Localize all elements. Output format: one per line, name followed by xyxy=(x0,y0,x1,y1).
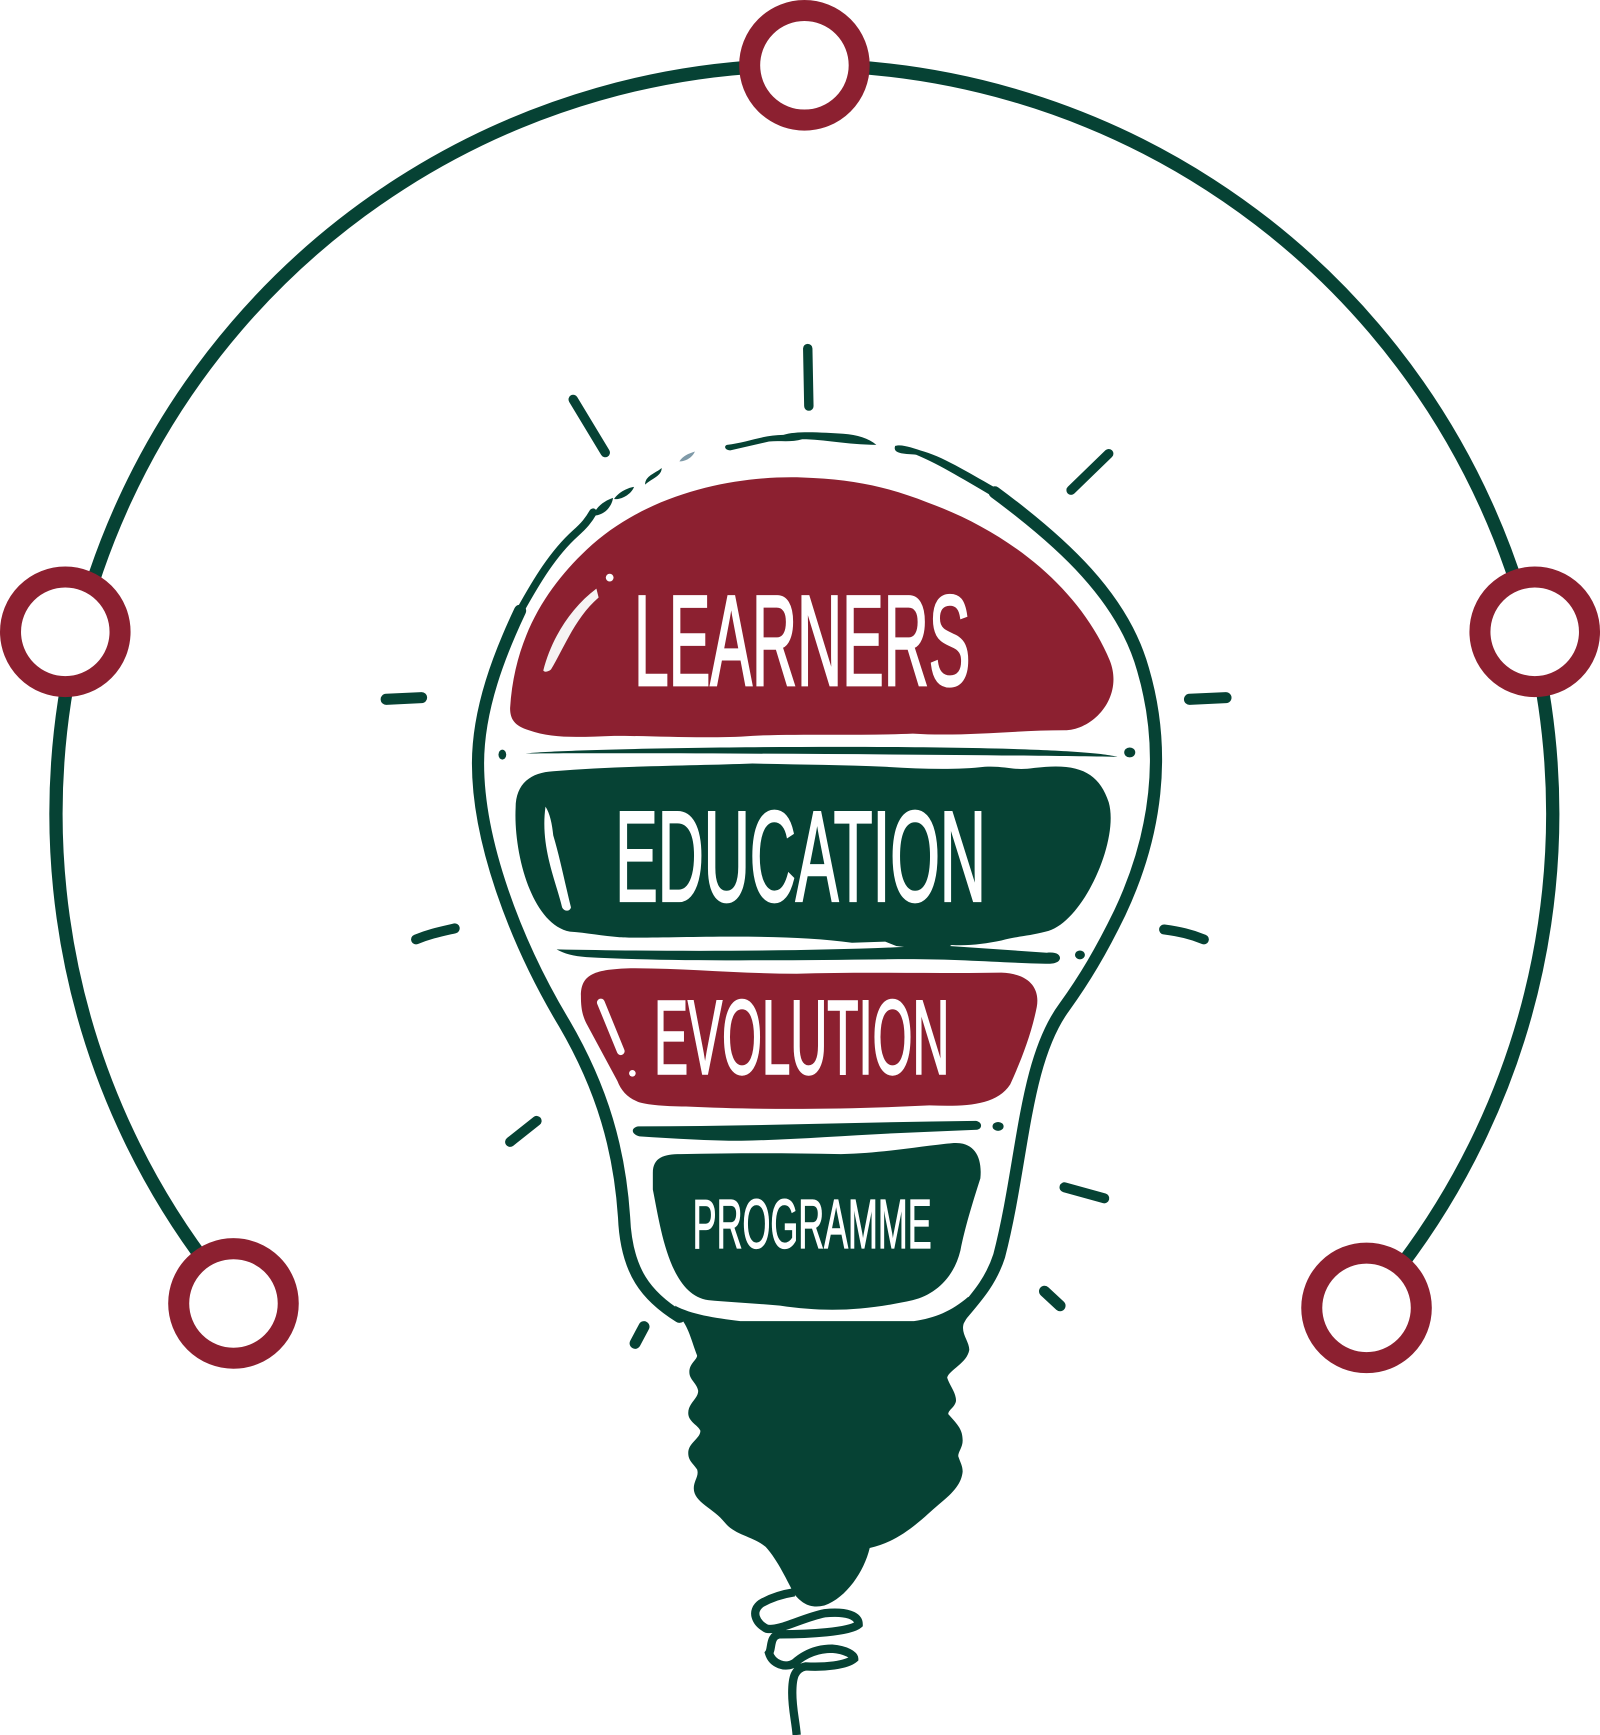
divider strip 2 xyxy=(557,946,1085,964)
node circles xyxy=(11,11,1589,1363)
panel: evolution xyxy=(581,968,1037,1109)
panel: learners xyxy=(510,477,1113,737)
bulb base xyxy=(675,1297,974,1607)
panel: education: EDUCATION xyxy=(615,786,986,929)
panel: programme xyxy=(653,1143,981,1310)
divider strip 3 xyxy=(633,1121,1004,1141)
divider strip 1 xyxy=(498,747,1135,760)
highlight xyxy=(544,807,571,911)
panel: learners: LEARNERS xyxy=(634,570,970,713)
panel: evolution: EVOLUTION xyxy=(654,979,949,1096)
wire xyxy=(755,1592,859,1735)
light rays xyxy=(386,349,1226,1343)
large arc connecting nodes xyxy=(56,65,1553,1308)
bulb outline xyxy=(478,432,1156,1319)
highlight xyxy=(543,589,599,672)
panel: education xyxy=(515,763,1111,952)
label: programme: PROGRAMME xyxy=(693,1185,932,1263)
highlight xyxy=(601,1002,621,1051)
